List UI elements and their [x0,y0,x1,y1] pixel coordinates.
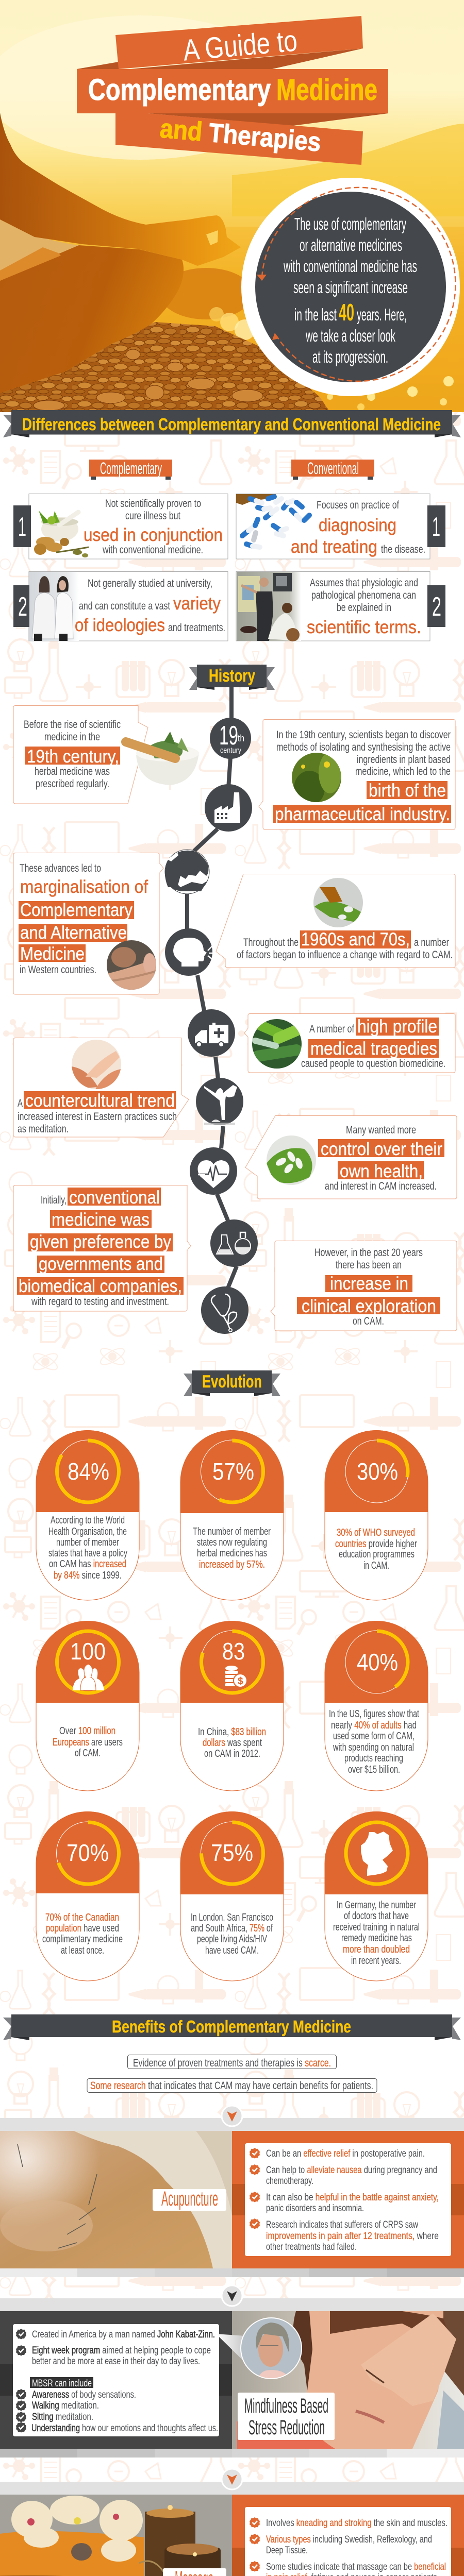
benefit: alleviate nausea: chemotherapy. [266,2176,313,2187]
stat text: more than doubled [343,1944,410,1955]
stat text: countries provide higher [335,1538,417,1550]
callout: clinical exploration [271,1241,457,1331]
text: not generally studied: Not generally studied at university, [88,578,212,589]
benefit: alleviate nausea: Can help to alleviate nausea during pregnancy and [266,2165,437,2176]
stat card: 70%: 70% [67,1839,109,1866]
callout: before the rise of scientific medicine: Before the rise of scientific [24,719,121,731]
text: not scientifically proven [84,498,223,556]
stat text: over $15 billion. [348,1764,400,1775]
badge 1 [427,505,445,547]
callout: birth of the pharmaceutical industry [259,719,455,829]
callout: countercultural trend: A [18,1097,23,1109]
text: focuses on practice: Focuses on practice of [317,499,399,511]
circle icon: head speaking [165,928,217,976]
callout: high profile medical tragedies: high profile [357,1016,437,1037]
stat text: 70% of the Canadian [45,1912,119,1923]
callout: conventional medicine preference: medicine was [52,1210,150,1230]
stat card: 30% [325,1430,428,1600]
stat text: at least once. [61,1945,104,1956]
benefit: pain relief [250,2561,446,2576]
benefit: anxiety: It can also be helpful in the battle against anxiety, [266,2192,439,2203]
callout: control over their own health: control over their [321,1139,442,1159]
icon: arrow down orange [222,2469,242,2489]
callout: high profile medical tragedies [244,1014,455,1073]
intro text: at its progression. [312,347,388,366]
benefit: eight week program: better and be more at ease in their day to day lives. [32,2356,200,2367]
ring 75% [201,1822,264,1885]
circle icon: globe [165,850,209,894]
icon: coins [225,1666,247,1687]
circle: 19th century: th [238,733,244,743]
heading: Benefits of Complementary Medicine [3,2014,461,2040]
callout: birth of the pharmaceutical industry: birth of the [369,781,446,801]
text: not generally studied [75,578,225,635]
heading: History [189,665,275,690]
callout: 1960s and 70s: 1960s and 70s, [301,929,410,950]
circle icon: ambulance [188,1009,235,1057]
benefit: walking: Walking meditation. [32,2400,99,2411]
heading: Evolution: Evolution [202,1372,262,1392]
circle icon: factory [205,784,252,832]
circle icon: flasks [210,1219,258,1267]
label: Acupuncture: Acupuncture [161,2188,218,2210]
photo: green capsules [252,1019,302,1069]
image: lecture room [237,572,301,641]
stat text: products reaching [344,1753,403,1764]
text: focuses on practice: and treating [291,537,377,557]
stat text: states that have a policy [48,1548,127,1559]
stat text: According to the World [51,1515,125,1526]
text: assumes that physiologic: scientific terms. [307,617,421,637]
callout: marginalisation: Medicine [20,944,85,964]
stat card: 84%: 84% [68,1458,109,1485]
text: not generally studied: variety [173,594,221,614]
stat text: population have used [46,1923,119,1934]
stat card: $83 billion [180,1621,284,1791]
title line: and Therapies [159,114,322,158]
callout: marginalisation: Complementary [20,900,132,920]
benefit: John Kabat-Zinn: Created in America by a man named John Kabat-Zinn. [32,2329,215,2340]
stat text: dollars was spent [203,1737,262,1749]
text: assumes that physiologic: be explained in [337,602,391,614]
stat text [48,1515,127,1581]
benefit: CRPS pain [250,2218,439,2252]
callout: control over their own health: Many wanted more [346,1124,416,1136]
badge 1 [13,505,31,547]
ring 83% [201,1631,264,1693]
badge 2 [13,585,31,627]
text: not generally studied: and treatments. [168,622,225,634]
stat text: Health Organisation, the [48,1526,127,1537]
benefit: eight week program: Eight week program aimed at helping people to cope [32,2345,211,2356]
label: MBSR can include: MBSR can include [32,2378,92,2389]
tab: Complementary [89,459,172,480]
stat text [191,1912,273,1956]
callout: before the rise of scientific medicine: prescribed regularly. [36,778,109,790]
heading: History: History [209,666,255,686]
image: lab researchers [29,572,79,641]
intro text [283,214,417,366]
callout: 1960s and 70s: a number [414,937,449,948]
stat text: of doctors that have [344,1910,409,1922]
label: Mindfulness Based Stress Reduction: Mindfulness Based [244,2395,328,2417]
ring 84% [57,1440,120,1503]
badge 2: 2 [18,592,27,622]
image: herb mortar and pestle [126,732,199,785]
circle icon: heart pulse [190,1147,237,1195]
intro text: we take a closer look [305,326,395,345]
stat card: 30%: 30% [357,1458,398,1485]
badge 1: 1 [18,512,26,542]
stat text: in CAM. [363,1560,389,1571]
callout: conventional medicine preference: with regard to testing and investment. [31,1296,169,1308]
benefit: alleviate nausea [250,2164,437,2187]
intro text: years. Here, [357,305,407,324]
stat text: In China, $83 billion [198,1726,266,1738]
icon: arrow down dark [222,2285,242,2306]
benefit: various types [250,2534,432,2556]
heading: Differences between Complementary and Conventional Medicine [3,410,461,437]
benefit: understanding: Understanding how our emotions and thoughts affect us. [31,2423,218,2434]
note: some research: Some research that indicates that CAM may have certain benefits for patients. [90,2080,373,2092]
stat card: 40% [325,1621,428,1791]
note: evidence is scarce: Evidence of proven treatments and therapies is scarce. [133,2057,331,2069]
callout: countercultural trend: as meditation. [18,1123,69,1135]
benefit: kneading: Involves kneading and stroking the skin and muscles. [266,2518,448,2529]
callout: conventional medicine preference: governments and [39,1254,163,1274]
ring 70% [57,1822,120,1885]
stat card: 75% [180,1811,284,1981]
circle icon: yoga figure [196,1078,243,1125]
benefit: CRPS pain: Research indicates that sufferers of CRPS saw [266,2219,418,2230]
ring full [57,1631,119,1693]
stat card: $83 billion: 83 [222,1638,245,1665]
stat card: 84% [36,1430,139,1600]
text: not generally studied: of ideologies [75,615,165,635]
stat text: Over 100 million [59,1725,115,1737]
label: Mindfulness Based Stress Reduction [238,2393,335,2440]
circle icon: stethoscope [201,1286,248,1334]
stat text [193,1526,271,1570]
heading: Evolution [184,1370,280,1396]
benefit: awareness: Awareness of body sensations. [32,2389,136,2400]
stat card: 57% [180,1430,284,1600]
stat text: and South Africa, 75% of [191,1923,273,1934]
stat text [53,1725,123,1759]
intro circle [241,178,460,396]
callout: 1960s and 70s: Throughout the [243,937,299,948]
photo: white tablets on leaf [267,1136,316,1185]
photo: woman with headache [232,2308,464,2449]
card: conventional 1 [236,494,445,559]
circle: 19th century: 19 [219,721,238,751]
benefit: pain relief: Some studies indicate that massage can be beneficial [266,2562,446,2572]
label: Acupuncture [153,2188,226,2211]
ring 30% [345,1440,408,1503]
photo: pills and bottle [313,878,363,927]
section band: acupuncture [0,2118,464,2277]
callout: control over their own health: own health, [340,1161,423,1181]
stat text [198,1726,266,1759]
callout: countercultural trend [13,1038,189,1137]
stat text [329,1708,419,1775]
text: focuses on practice: the disease. [381,544,425,555]
benefit: various types: Deep Tissue. [266,2545,308,2556]
text: assumes that physiologic: pathological phenomena can [311,589,416,601]
timeline line [187,687,237,1288]
image: blue pills [236,494,309,547]
stat text: states now regulating [197,1537,267,1548]
stat card: 75%: 75% [211,1839,253,1866]
circle: 19th century [210,718,251,759]
note: some research [87,2078,377,2093]
photo: acupressure on arm [107,940,156,990]
stat text: have used CAM. [205,1945,259,1956]
stat text: of CAM. [75,1748,101,1759]
callout: conventional medicine preference: conventional [69,1188,160,1208]
title line: and Therapies: and [159,114,204,147]
stat text: on CAM in 2012. [204,1748,260,1759]
stat text: received training in natural [333,1922,420,1933]
text: focuses on practice [291,499,425,557]
callout: control over their own health [245,1116,457,1199]
stat card: 57%: 57% [212,1458,254,1485]
stat text: increased by 57%. [199,1559,265,1570]
callout: marginalisation: and Alternative [20,923,127,943]
stat text: in recent years. [351,1955,401,1967]
tab: Conventional [291,459,374,480]
benefit: effective relief: Can be an effective relief in postoperative pain. [266,2148,425,2159]
stat text: 30% of WHO surveyed [337,1527,415,1538]
title line: Complementary Medicine: Complementary [88,73,271,107]
benefit: eight week program [16,2345,211,2367]
text: assumes that physiologic [307,577,421,637]
text: not scientifically proven: Not scientifically proven to [105,498,201,510]
callout: clinical exploration: there has been an [336,1259,402,1271]
label: Mindfulness Based Stress Reduction: Stress Reduction [248,2416,325,2439]
benefit: sitting: Sitting meditation. [32,2412,93,2422]
panel: mindfulness benefits [0,2311,232,2449]
intro text: 40 [339,299,354,326]
stat text: complimentary medicine [42,1934,123,1945]
panel: massage benefits [232,2495,464,2576]
photo: massage stones and towels [0,2495,232,2576]
callout: conventional medicine preference: Initially, [41,1194,67,1206]
stat text: by 84% since 1999. [54,1570,122,1581]
callout: before the rise of scientific medicine: medicine in the [44,731,100,743]
stat card: 100 million [36,1621,139,1791]
benefit: sitting [16,2412,93,2422]
callout: conventional medicine preference: biomedical companies, [19,1276,182,1296]
callout: before the rise of scientific medicine: 19th century, [27,747,119,767]
callout: marginalisation: marginalisation of [20,877,148,897]
callout: clinical exploration: on CAM. [353,1315,384,1327]
callout: high profile medical tragedies: A number of [309,1023,354,1035]
section band: mindfulness [0,2298,464,2458]
stat text: nearly 40% of adults had [331,1720,417,1731]
icon: coins: $ [238,1676,243,1687]
stat text [42,1912,123,1956]
stat text: used some form of CAM, [333,1731,415,1742]
benefit: CRPS pain: improvements in pain after 12 treatments, where [266,2231,439,2242]
stat text: In the US, figures show that [329,1708,419,1720]
callout: clinical exploration: However, in the past 20 years [314,1247,423,1259]
heading: Benefits of Complementary Medicine: Benefits of Complementary Medicine [112,2017,351,2036]
callout: 1960s and 70s [216,874,455,968]
ring full [346,1822,408,1884]
text: not generally studied: and can constitute a vast [79,600,170,612]
benefit: CRPS pain: other treatments had failed. [266,2242,357,2252]
icon: Germany map [361,1832,393,1876]
badge 2: 2 [432,592,441,622]
stat text [333,1900,420,1967]
ring 40% [345,1631,408,1693]
stat text: remedy medicine has [341,1933,412,1944]
text: not scientifically proven: used in conjunction [84,525,223,545]
text: assumes that physiologic: Assumes that physiologic and [310,577,418,589]
text: focuses on practice: diagnosing [319,515,396,535]
callout: conventional medicine preference: given preference by [30,1232,171,1252]
tab: Complementary: Complementary [100,459,162,478]
stat text: people living Aids/HIV [197,1934,267,1945]
title ribbon: Medicine [276,73,377,107]
callout: birth of the pharmaceutical industry: pharmaceutical industry. [275,804,450,824]
icon: people [73,1664,104,1690]
photo: massage hands [72,1040,121,1089]
label: MBSR can include [30,2377,93,2389]
stat text: number of member [56,1537,119,1548]
card: conventional 2 [236,572,445,641]
photo: dandelions [292,752,341,806]
callout: countercultural trend: increased interest in Eastern practices such [18,1111,177,1123]
callout: marginalisation: in Western countries. [20,964,96,976]
panel: acupuncture benefits [232,2131,464,2268]
callout: countercultural trend: countercultural trend [25,1091,175,1111]
tab: Conventional: Conventional [307,459,359,478]
stat text: with spending on natural [333,1742,414,1753]
stat text: In Germany, the number [337,1900,416,1911]
callout: conventional medicine preference [13,1185,191,1311]
intro text: in the last [294,305,337,324]
stat text: Europeans are users [53,1737,123,1748]
stat text: education programmes [339,1549,415,1560]
label: Massage [163,2567,226,2576]
stat card: 70% [36,1811,139,1981]
text: not scientifically proven: cure illness but [125,510,180,522]
portrait: John Kabat-Zinn [216,2317,302,2379]
stat text: on CAM has increased [49,1558,126,1570]
ring 57% [201,1440,264,1503]
callout: clinical exploration: clinical exploration [302,1296,436,1316]
section band: massage [0,2482,464,2576]
text: not scientifically proven: with conventional medicine. [102,544,203,556]
icon: arrow down orange [222,2106,242,2126]
callout: marginalisation: These advances led to [20,862,101,874]
stat text: herbal medicines has [197,1548,267,1559]
benefit: various types: Various types including Swedish, Reflexology, and [266,2534,432,2545]
circle: 19th century: century [220,746,241,755]
stat card: 40%: 40% [357,1649,398,1675]
benefit: anxiety [250,2192,439,2214]
callout: before the rise of scientific medicine: herbal medicine was [35,766,110,777]
stat text [335,1527,417,1571]
stat card: Germany [325,1811,428,1981]
callout: before the rise of scientific medicine [13,706,148,804]
card: complementary 1 [13,494,228,559]
stat text: The number of member [193,1526,271,1537]
title ribbon [77,16,388,165]
hero photo: meditation at sunset [0,0,464,412]
callout: clinical exploration: increase in [330,1274,408,1294]
callout: high profile medical tragedies: medical tragedies [310,1039,437,1059]
badge 1: 1 [432,512,440,542]
title line: and Therapies: Therapies [208,118,322,158]
badge 2 [427,585,445,627]
stat text: In London, San Francisco [191,1912,273,1923]
title line: A Guide to: A Guide to [181,24,299,67]
photo: acupuncture [0,2131,232,2268]
stat card: 100 million: 100 [70,1638,106,1665]
benefit: anxiety: panic disorders and insomnia. [266,2203,364,2214]
image: herbs in mortar [34,511,89,557]
card: complementary 2 [13,572,228,641]
callout: marginalisation [13,853,163,994]
